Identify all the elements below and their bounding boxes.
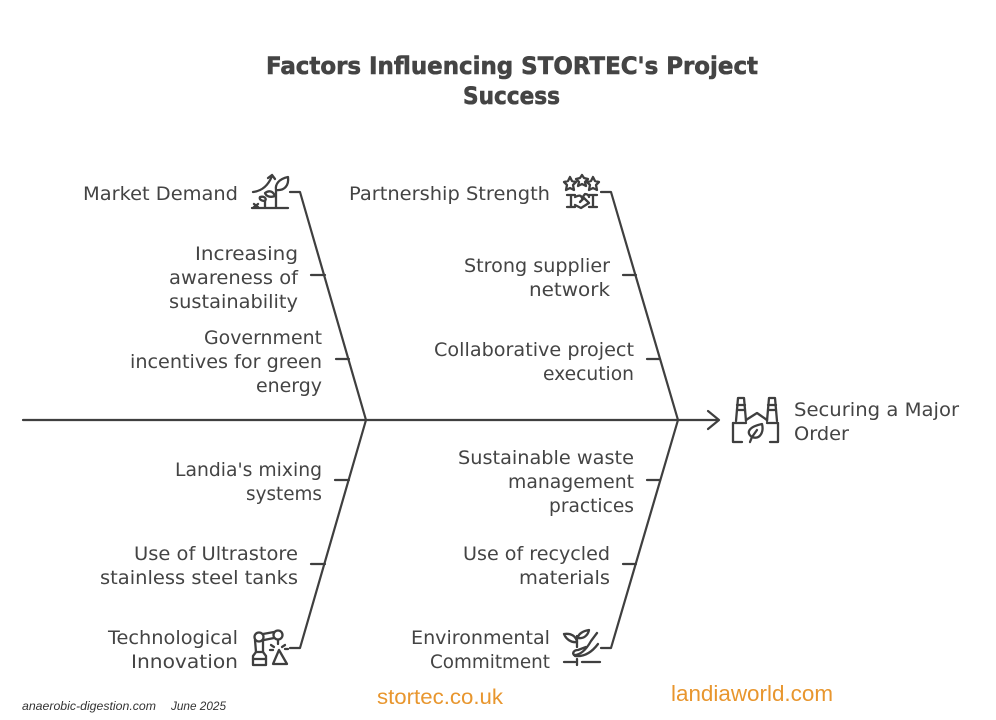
text: increasing awareness: Increasing — [195, 243, 298, 265]
fishbone diagonal bones and ribs — [290, 192, 678, 648]
text: sustainable waste practices — [458, 447, 634, 517]
icon: stars and handshake — [564, 175, 599, 208]
outcome label: Securing a Major Order: Order — [794, 423, 849, 445]
outcome label: Securing a Major Order — [794, 399, 959, 445]
text: Landia's mixing systems — [175, 459, 322, 505]
text: Ultrastore tanks — [100, 543, 298, 589]
heading: Environmental Commitment: Commitment — [430, 651, 550, 673]
fishbone spine arrow — [23, 411, 719, 429]
heading: Environmental Commitment — [411, 627, 550, 673]
text: Ultrastore tanks: stainless steel tanks — [100, 567, 298, 589]
heading: Market Demand: Market Demand — [83, 183, 238, 205]
link: landiaworld.com: landiaworld.com — [671, 681, 833, 706]
heading: Environmental Commitment: Environmental — [411, 627, 550, 649]
date: June 2025 — [170, 699, 226, 713]
title: Success — [463, 82, 560, 110]
text: collaborative project execution: Collaborative project — [434, 339, 634, 361]
text: collaborative project execution: execution — [543, 363, 634, 385]
icon: growing plant with arrow — [252, 175, 288, 208]
heading: Partnership Strength: Partnership Strength — [349, 183, 550, 205]
icon: robot arm — [253, 630, 288, 665]
text: recycled materials: materials — [519, 567, 610, 589]
heading: Technological Innovation: Innovation — [131, 651, 238, 673]
text: government incentives: energy — [256, 375, 322, 397]
text: increasing awareness: sustainability — [169, 291, 298, 313]
text: recycled materials: Use of recycled — [463, 543, 610, 565]
text: Landia's mixing systems: systems — [246, 483, 322, 505]
text: strong supplier network — [464, 255, 610, 301]
text: increasing awareness — [169, 243, 299, 313]
text: government incentives: Government — [204, 327, 322, 349]
source credit: anaerobic-digestion.com — [22, 699, 156, 713]
icon: green factory — [733, 398, 778, 442]
title: Factors Influencing STORTEC's Project — [266, 52, 758, 80]
text: collaborative project execution — [434, 339, 634, 385]
text: recycled materials — [463, 543, 610, 589]
outcome label: Securing a Major Order: Securing a Major — [794, 399, 959, 421]
heading: Technological Innovation: Technological — [107, 627, 238, 649]
heading: Technological Innovation — [107, 627, 238, 673]
text: sustainable waste practices: Sustainable waste — [458, 447, 634, 469]
text: sustainable waste practices: management — [508, 471, 634, 493]
text: sustainable waste practices: practices — [549, 495, 634, 517]
text: strong supplier network: Strong supplier — [464, 255, 610, 277]
text: strong supplier network: network — [529, 279, 610, 301]
text: Ultrastore tanks: Use of Ultrastore — [134, 543, 298, 565]
link: stortec.co.uk: stortec.co.uk — [377, 686, 504, 709]
text: Landia's mixing systems: Landia's mixing — [175, 459, 322, 481]
title — [266, 52, 758, 110]
text: increasing awareness: awareness of — [169, 267, 299, 289]
icon: plant in hand — [564, 630, 600, 665]
text: government incentives: incentives for green — [130, 351, 322, 373]
text: government incentives — [130, 327, 322, 397]
